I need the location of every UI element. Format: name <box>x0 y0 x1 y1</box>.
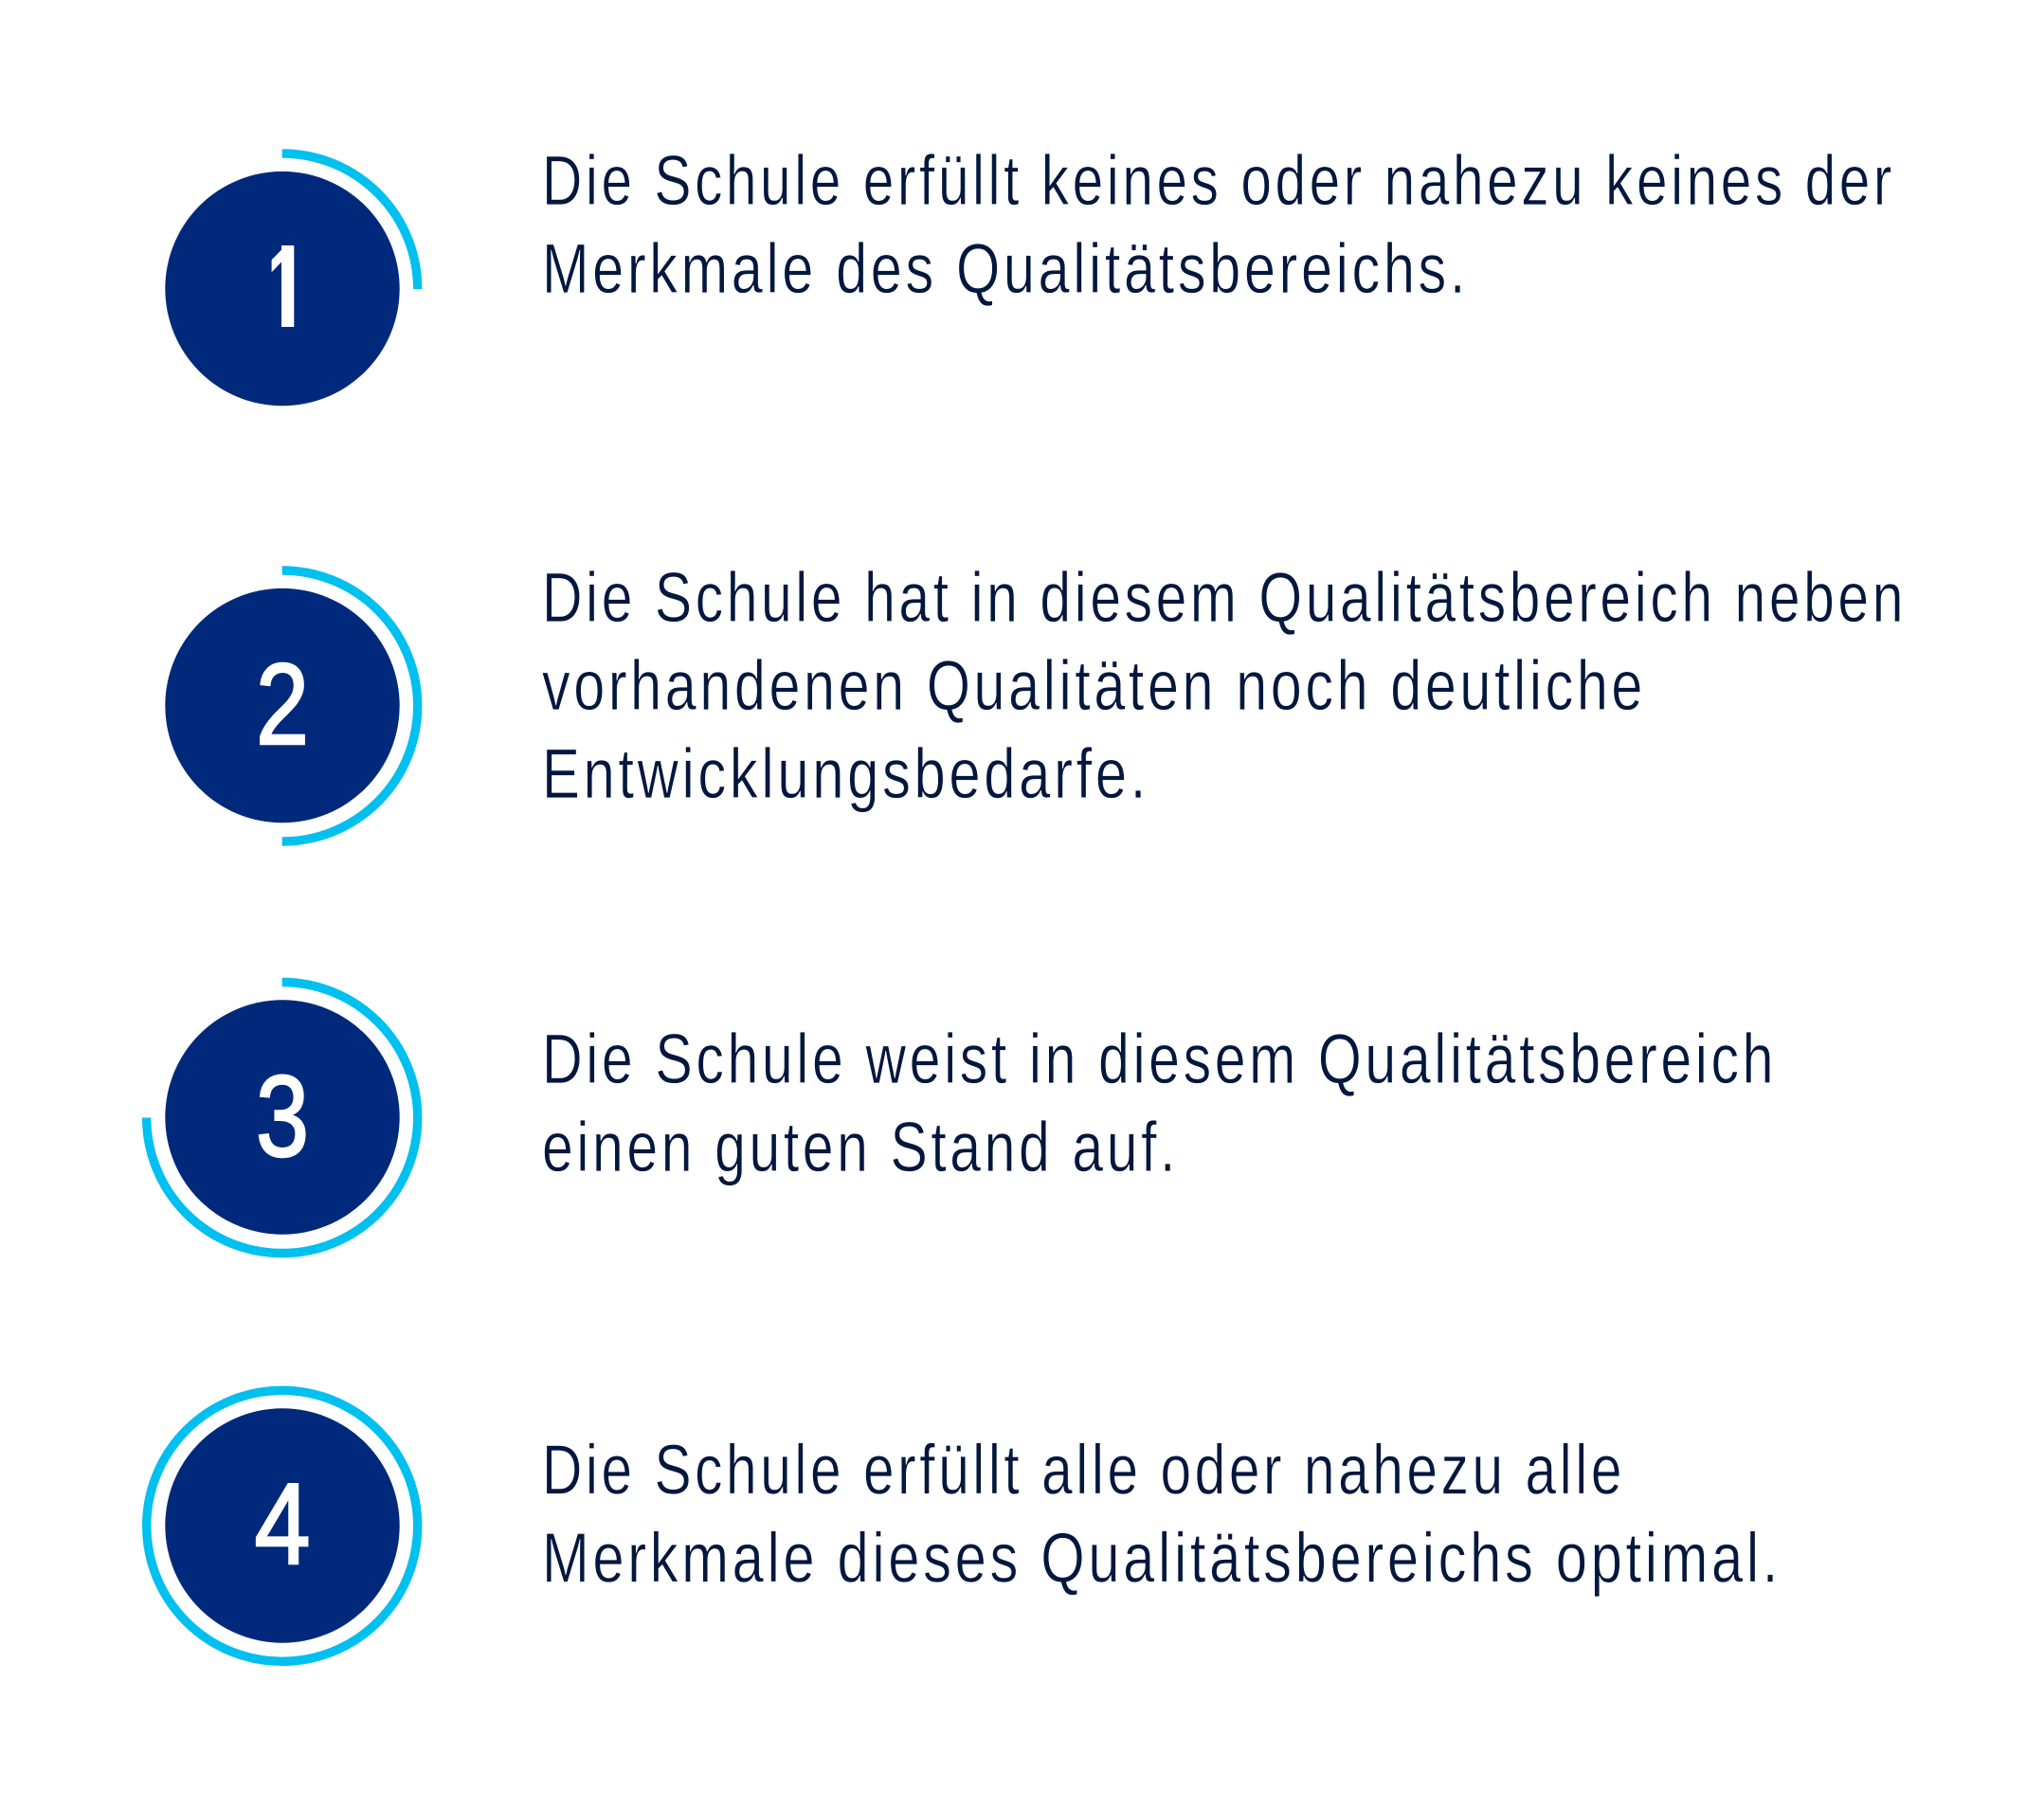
badge 2 with half progress arc <box>165 570 418 841</box>
badge 1 with quarter progress arc: 1 <box>265 223 309 352</box>
text block 3: einen guten Stand auf. <box>542 1108 1179 1186</box>
badge 4 with full progress ring: 4 <box>254 1459 311 1588</box>
text block 1: Merkmale des Qualitätsbereichs. <box>542 229 1469 308</box>
badge 3 with three-quarter progress arc <box>147 982 418 1253</box>
badge 4 with full progress ring <box>147 1390 418 1661</box>
text block 2: Entwicklungsbedarfe. <box>542 734 1149 813</box>
text block 3 <box>542 1020 1777 1186</box>
text block 4: Merkmale dieses Qualitätsbereichs optimal. <box>542 1518 1782 1598</box>
item 4 <box>147 1390 1782 1661</box>
badge 1 with quarter progress arc <box>165 154 418 406</box>
badge 2 with half progress arc: 2 <box>256 640 309 768</box>
text block 2: vorhandenen Qualitäten noch deutliche <box>542 646 1646 725</box>
item 3 <box>147 982 1777 1253</box>
item 2 <box>165 558 1907 841</box>
text block 3: Die Schule weist in diesem Qualitätsbereich <box>542 1020 1777 1098</box>
text block 2 <box>542 558 1907 813</box>
text block 1 <box>542 141 1895 308</box>
item 1 <box>165 141 1895 406</box>
text block 4 <box>542 1431 1782 1598</box>
text block 4: Die Schule erfüllt alle oder nahezu alle <box>542 1431 1625 1509</box>
badge 3 with three-quarter progress arc: 3 <box>256 1052 309 1181</box>
